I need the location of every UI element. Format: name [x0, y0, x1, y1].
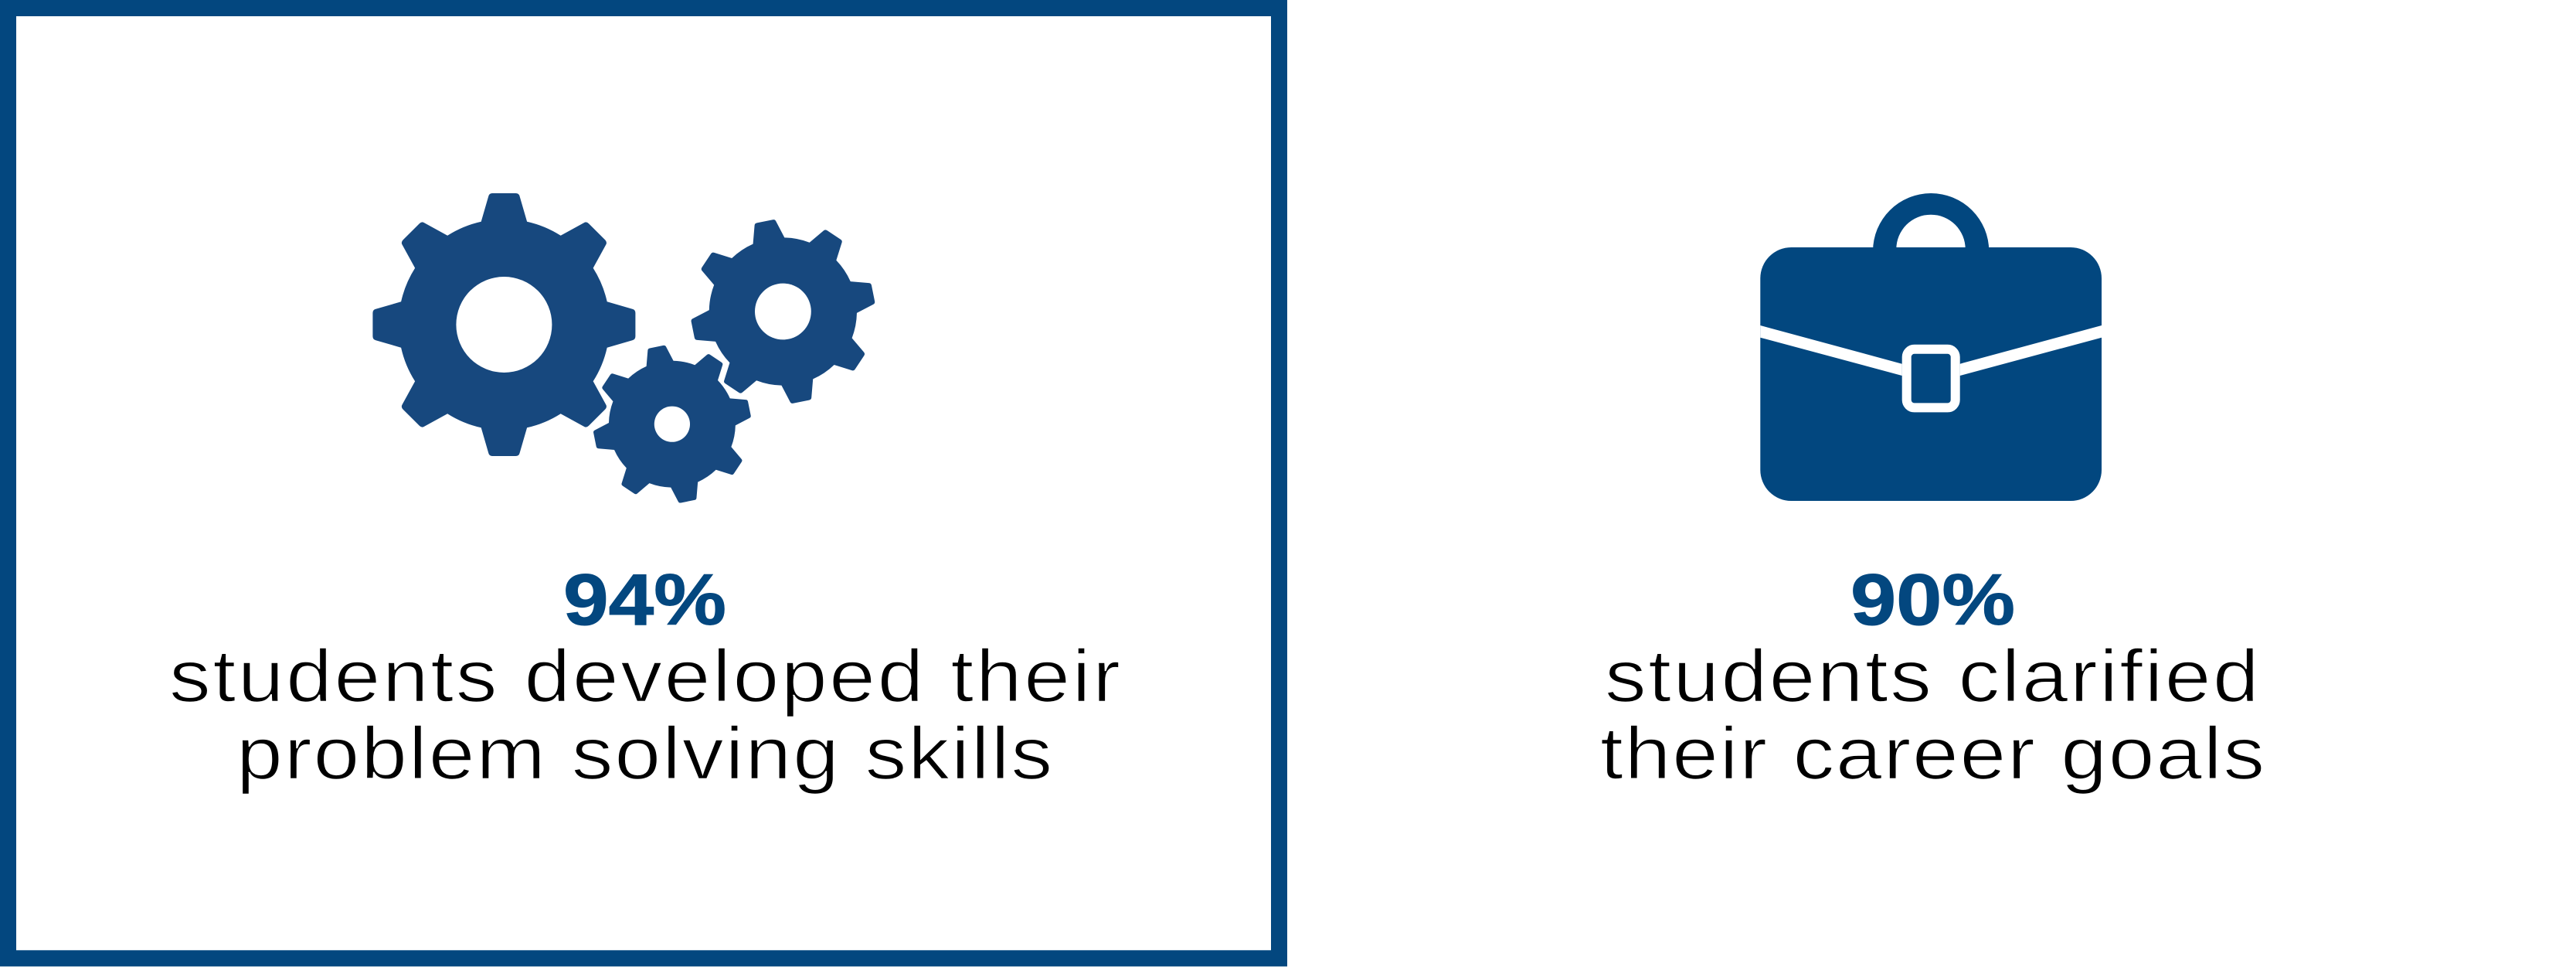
caption: career goals — [1600, 635, 2265, 795]
statistic: 90%: 90% — [1850, 559, 2015, 640]
icon: large gear — [372, 193, 635, 456]
icon: small gear — [579, 332, 765, 517]
statistic: 94%: 94% — [563, 559, 726, 640]
panel: problem solving skills — [8, 8, 1280, 958]
icon: medium gear — [675, 203, 892, 420]
briefcase flap line — [1760, 325, 2102, 376]
caption: problem solving skills — [169, 635, 1120, 795]
briefcase clasp — [1907, 349, 1956, 407]
panel: career goals — [1600, 193, 2265, 795]
caption: problem solving skills: students developed their — [169, 635, 1120, 717]
briefcase handle — [1873, 193, 1989, 251]
caption: problem solving skills: problem solving skills — [236, 712, 1052, 795]
caption: career goals: their career goals — [1600, 712, 2265, 795]
panel border — [8, 8, 1280, 958]
caption: career goals: students clarified — [1605, 635, 2259, 717]
icon: gears — [372, 193, 892, 517]
icon: briefcase — [1760, 193, 2102, 501]
briefcase body — [1760, 247, 2102, 501]
